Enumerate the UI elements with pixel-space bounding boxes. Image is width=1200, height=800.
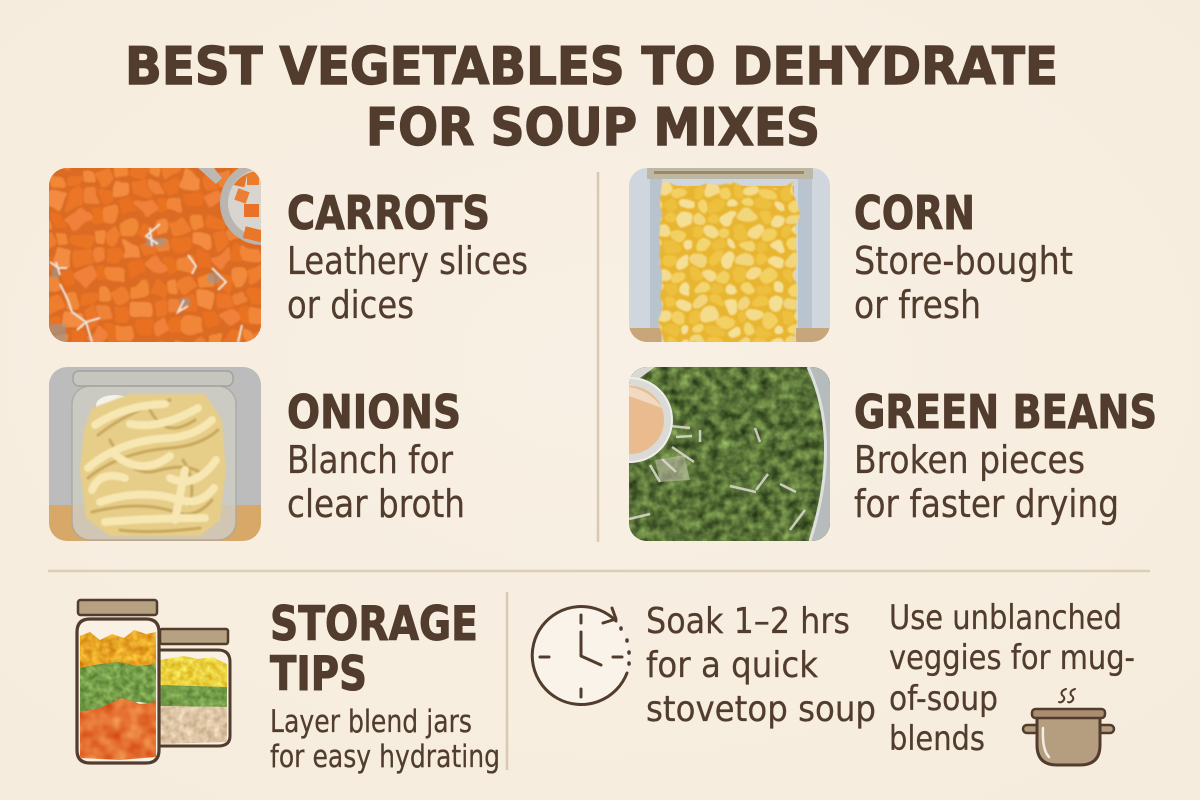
photo: dried green beans on a dehydrator tray [629, 367, 830, 541]
photo: dried carrot dices on a tray [49, 168, 261, 342]
corn heading: CORN [854, 186, 975, 240]
storage tips description [270, 704, 500, 775]
storage tips heading: TIPS [270, 647, 367, 702]
title [125, 37, 1058, 158]
panel: green beans [588, 367, 1157, 541]
green beans description: for faster drying [854, 482, 1119, 526]
panel: storage tips [77, 597, 500, 775]
onions heading: ONIONS [287, 385, 461, 439]
panel: mug-of-soup tip [889, 598, 1135, 765]
soak tip text [646, 601, 876, 730]
mug-of-soup text [889, 598, 1135, 759]
onions description [287, 438, 465, 526]
soak tip text: for a quick [646, 645, 818, 686]
panel: carrots [49, 168, 527, 342]
photo: dried onion strips in a glass jar [49, 367, 261, 541]
panel: corn [629, 168, 1073, 346]
corn description [854, 239, 1073, 327]
large jar [77, 600, 159, 763]
carrots description [287, 239, 528, 327]
soak tip text: stovetop soup [646, 689, 876, 730]
title: FOR SOUP MIXES [366, 98, 820, 158]
onions description: clear broth [287, 482, 465, 526]
green beans description: Broken pieces [854, 438, 1085, 482]
icon: clock with arrow [532, 607, 629, 705]
carrots description: Leathery slices [287, 239, 528, 283]
photo: dried corn in a glass jar [629, 168, 830, 346]
icon: steaming soup pot [1023, 689, 1114, 765]
mug-of-soup text: Use unblanched [889, 598, 1122, 638]
mug-of-soup text: of-soup [889, 679, 998, 719]
small jar [156, 629, 230, 746]
carrots description: or dices [287, 283, 414, 327]
storage tips description: Layer blend jars [270, 704, 472, 740]
onions description: Blanch for [287, 438, 453, 482]
storage tips description: for easy hydrating [270, 739, 500, 775]
soak tip text: Soak 1–2 hrs [646, 601, 850, 642]
carrots heading: CARROTS [287, 186, 490, 240]
icon: layered soup mix jars [77, 600, 230, 763]
corn description: or fresh [854, 283, 981, 327]
mug-of-soup text: blends [889, 719, 985, 759]
mug-of-soup text: veggies for mug- [889, 638, 1135, 678]
storage tips heading: STORAGE [270, 597, 478, 652]
panel: onions [49, 367, 465, 541]
green beans description [854, 438, 1119, 526]
title: BEST VEGETABLES TO DEHYDRATE [125, 37, 1058, 97]
storage tips heading [270, 597, 478, 702]
corn description: Store-bought [854, 239, 1073, 283]
panel: soak tip [532, 601, 876, 730]
